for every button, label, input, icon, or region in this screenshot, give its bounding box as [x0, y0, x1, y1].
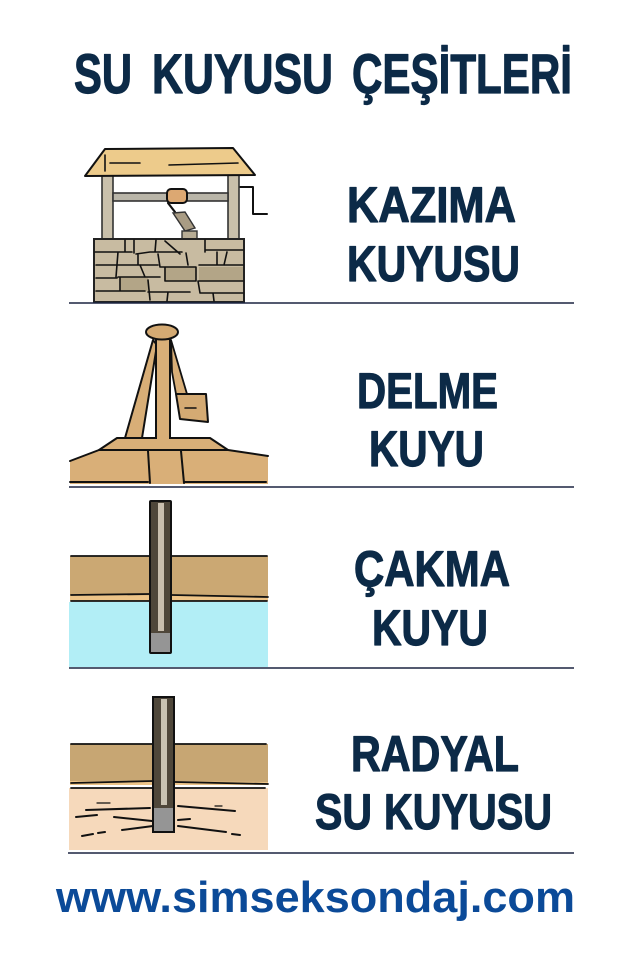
ground block	[70, 450, 268, 484]
panel: kazima kuyusu	[85, 148, 520, 302]
label: radyal su kuyusu: KUYUSU	[384, 784, 552, 840]
label: delme kuyu: KUYU	[369, 421, 484, 477]
title	[74, 42, 572, 105]
stone base	[94, 239, 244, 302]
pulley top	[146, 324, 178, 340]
rope and bucket	[168, 203, 197, 251]
icon: driven well	[69, 501, 268, 667]
sand layer	[69, 788, 268, 850]
well roof	[85, 148, 255, 176]
label: cakma kuyu	[354, 541, 510, 656]
icon: stone well	[85, 148, 267, 302]
bucket	[176, 394, 208, 422]
label: kazima kuyusu: KAZIMA	[347, 177, 516, 233]
well beam	[113, 193, 228, 201]
platform	[99, 438, 228, 450]
label: cakma kuyu: ÇAKMA	[354, 541, 510, 597]
title: ÇEŞİTLERİ	[352, 42, 572, 105]
well hub	[167, 189, 187, 203]
label: radyal su kuyusu: SU	[315, 784, 372, 840]
panel: delme kuyu	[70, 324, 498, 484]
well crank handle	[239, 187, 267, 214]
pipe	[153, 697, 174, 832]
panel: radyal su kuyusu	[69, 697, 552, 850]
label: kazima kuyusu: KUYUSU	[347, 236, 520, 292]
panel: cakma kuyu	[69, 501, 510, 667]
label: delme kuyu	[357, 363, 498, 477]
icon: radial well	[69, 697, 268, 850]
tripod leg	[125, 340, 157, 438]
title: SU	[74, 42, 132, 105]
central post	[156, 339, 170, 438]
pipe	[150, 501, 171, 653]
water layer	[69, 602, 268, 667]
label: delme kuyu: DELME	[357, 363, 498, 419]
icon: drilling tripod	[70, 324, 268, 484]
label: radyal su kuyusu	[315, 726, 552, 840]
website url: www.simseksondaj.com	[55, 873, 575, 922]
label: cakma kuyu: KUYU	[372, 600, 488, 656]
label: kazima kuyusu	[347, 177, 520, 292]
title: KUYUSU	[152, 42, 333, 105]
soil layer	[70, 556, 268, 601]
label: radyal su kuyusu: RADYAL	[351, 726, 519, 782]
bucket strap	[171, 340, 187, 394]
soil layer	[70, 744, 268, 788]
well posts	[102, 175, 239, 240]
